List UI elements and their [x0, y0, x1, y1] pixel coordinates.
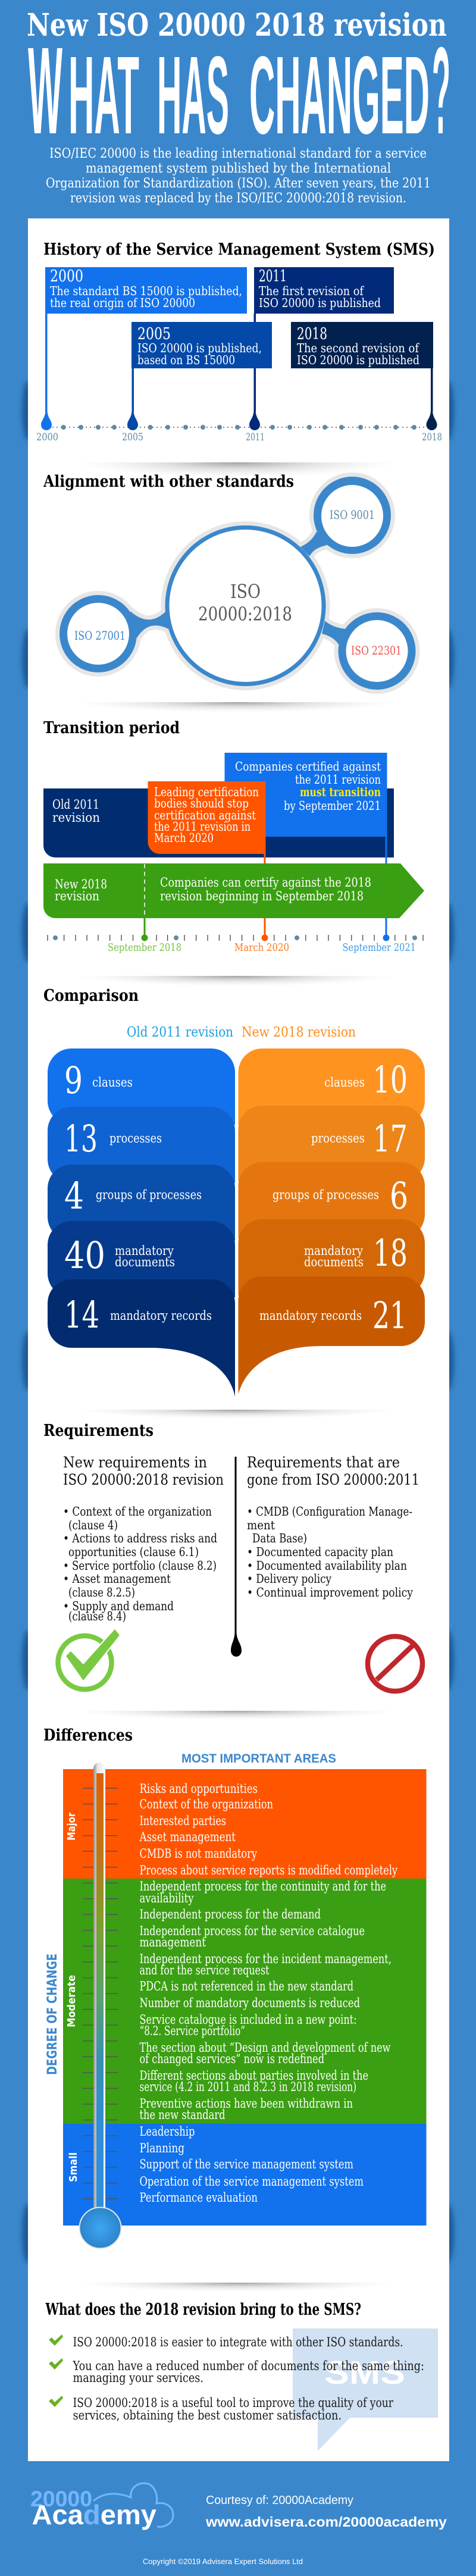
band: small: Support of the service management system: [139, 2157, 353, 2171]
circle ISO 27001: [60, 595, 137, 672]
benefit 3: [49, 2396, 394, 2423]
column: removed requirements: gone from ISO 20000:2011: [247, 1471, 419, 1488]
band: moderate: availability: [139, 1891, 194, 1905]
column: removed requirements: Data Base): [252, 1531, 307, 1545]
central circle: [165, 525, 326, 686]
chart: comparison: [48, 1023, 425, 1397]
column: new requirements: (clause 8.4): [68, 1609, 126, 1623]
new revision column: mandatory records: [259, 1309, 362, 1323]
column: new requirements: opportunities (clause 6.1): [68, 1545, 199, 1559]
column labels: [127, 1023, 356, 1040]
old revision column: mandatory records: [110, 1309, 212, 1323]
title: W: [28, 22, 62, 160]
old revision column: clauses: [92, 1075, 133, 1090]
band label: major: Major: [65, 1813, 78, 1841]
old revision column: groups of processes: [96, 1188, 202, 1203]
callout: certification bodies: bodies should stop: [154, 796, 249, 810]
axis labels: 2005: [122, 431, 143, 443]
intro text: revision was replaced by the ISO/IEC 20000:2018 revision.: [70, 191, 406, 206]
website url: www.advisera.com/20000academy: [205, 2514, 447, 2530]
intro text: ISO/IEC 20000 is the leading international standard for a service: [49, 146, 427, 161]
time axis: September 2021: [343, 941, 416, 954]
event 2018: ISO 20000 is published: [297, 353, 419, 367]
band label: small: Small: [67, 2152, 80, 2182]
thermometer: [80, 1763, 121, 2248]
column: new requirements: [63, 1454, 224, 1623]
old revision column: 4: [64, 1174, 84, 1217]
callout: must transition: Companies certified against: [235, 759, 381, 774]
new revision column: 6: [390, 1174, 408, 1217]
title: HAT: [68, 34, 139, 157]
event 2005: based on BS 15000: [137, 353, 235, 367]
column: new requirements: • Service portfolio (clause 8.2): [63, 1558, 217, 1573]
event 2000: the real origin of ISO 20000: [50, 296, 195, 310]
column labels: New 2018 revision: [242, 1023, 356, 1040]
event 2011: 2011: [259, 267, 287, 286]
benefit 2: [49, 2358, 424, 2386]
intro text: management system published by the International: [86, 161, 391, 176]
band: small: Operation of the service management system: [139, 2174, 364, 2189]
event 2000: 2000: [50, 267, 83, 286]
band: moderate: PDCA is not referenced in the new standard: [139, 1979, 353, 1993]
band: moderate: service (4.2 in 2011 and 8.2.3 in 2018 revision): [139, 2080, 356, 2094]
column: new requirements: • Supply and demand: [63, 1599, 174, 1613]
chart: transition period: [43, 753, 424, 954]
column: new requirements: (clause 4): [68, 1518, 118, 1532]
event 2018: [291, 322, 437, 430]
band: moderate: Service catalogue is included in a new point:: [139, 2012, 357, 2027]
axis labels: 2000: [36, 431, 58, 443]
new revision column: groups of processes: [273, 1188, 379, 1203]
callout: certification bodies: the 2011 revision in: [154, 819, 250, 834]
column: removed requirements: • Documented availability plan: [247, 1558, 407, 1573]
column labels: Old 2011 revision: [127, 1023, 233, 1040]
event 2005: ISO 20000 is published,: [137, 341, 262, 355]
band: moderate: The section about “Design and development of new: [139, 2040, 391, 2055]
column: new requirements: • Context of the organization: [63, 1504, 212, 1519]
heading: alignment: Alignment with other standards: [43, 472, 294, 491]
circle ISO 9001: ISO 9001: [330, 508, 375, 522]
benefit 2: managing your services.: [73, 2371, 203, 2386]
callout: must transition: by September 2021: [284, 799, 381, 813]
new revision arrow: revision: [55, 889, 99, 904]
column: new requirements: (clause 8.2.5): [68, 1585, 135, 1600]
main white panel: [28, 218, 449, 2461]
callout: certification bodies: certification against: [154, 808, 256, 822]
new revision column: 18: [373, 1231, 408, 1275]
event 2011: [249, 267, 394, 430]
axis labels: [36, 431, 442, 443]
callout: certification bodies: March 2020: [154, 831, 214, 845]
old revision column: documents: [115, 1255, 175, 1270]
band: moderate: Independent process for the service catalogue: [139, 1924, 365, 1938]
band: major: Process about service reports is modified completely: [139, 1863, 397, 1877]
event 2000: The standard BS 15000 is published,: [50, 284, 242, 298]
icon: check mark: [58, 1629, 120, 1689]
chart: differences thermometer: [45, 1752, 426, 2248]
new revision column: documents: [304, 1255, 364, 1270]
speech bubble with SMS: [293, 2328, 438, 2451]
event 2018: The second revision of: [297, 341, 419, 355]
column: new requirements: ISO 20000:2018 revision: [63, 1471, 224, 1488]
circle ISO 22301: ISO 22301: [351, 643, 402, 658]
icon: prohibited: [368, 1636, 422, 1691]
benefit 3: services, obtaining the best customer satisfaction.: [73, 2408, 342, 2423]
callout: certification bodies: [148, 781, 265, 854]
central circle: ISO: [230, 580, 261, 603]
footer: [30, 2483, 447, 2566]
central circle: 20000:2018: [198, 603, 292, 625]
event 2005: [127, 322, 272, 430]
intro text: [46, 146, 431, 206]
column: removed requirements: [247, 1454, 419, 1600]
callout: must transition: must transition: [300, 785, 381, 799]
column: removed requirements: ment: [247, 1518, 275, 1532]
heading: requirements: Requirements: [43, 1422, 154, 1440]
callout: certification bodies: Leading certification: [154, 785, 259, 799]
band: moderate: Independent process for the incident management,: [139, 1952, 392, 1966]
column: new requirements: New requirements in: [63, 1454, 207, 1471]
old revision column: 40: [64, 1234, 105, 1277]
column: removed requirements: • Delivery policy: [247, 1572, 331, 1586]
circle ISO 9001: [314, 477, 391, 554]
new revision arrow: New 2018: [55, 877, 107, 892]
band: moderate: Independent process for the continuity and for the: [139, 1879, 386, 1893]
time axis: March 2020: [234, 941, 289, 954]
event 2011: The first revision of: [259, 284, 364, 298]
old revision column: processes: [109, 1131, 162, 1146]
old revision bar: Old 2011: [52, 797, 99, 812]
time axis: [48, 934, 423, 954]
callout: must transition: the 2011 revision: [295, 772, 381, 787]
circle ISO 22301: [338, 612, 415, 690]
event 2018: 2018: [297, 325, 327, 343]
axis labels: 2018: [422, 431, 442, 443]
logo: 20000 Academy: 20000: [30, 2487, 92, 2511]
diagram: alignment with other standards: [60, 477, 415, 690]
band: moderate: Different sections about parties involved in the: [139, 2068, 368, 2083]
old revision column: 9: [64, 1059, 83, 1102]
new revision column: 17: [372, 1117, 408, 1160]
band: small: Performance evaluation: [139, 2190, 258, 2205]
benefit 3: ISO 20000:2018 is a useful tool to improve the quality of your: [73, 2396, 394, 2411]
column: new requirements: • Actions to address risks and: [63, 1531, 217, 1545]
band: major: Asset management: [139, 1830, 236, 1844]
new revision arrow: revision beginning in September 2018: [160, 889, 364, 904]
circle ISO 27001: ISO 27001: [74, 628, 126, 643]
new revision column: [238, 1048, 425, 1394]
heading: transition: Transition period: [43, 719, 180, 737]
logo: 20000 Academy: [30, 2483, 173, 2530]
column: removed requirements: • Documented capacity plan: [247, 1545, 393, 1559]
band: moderate: Preventive actions have been withdrawn in: [139, 2096, 353, 2111]
new revision column: clauses: [324, 1075, 365, 1090]
band: moderate: management: [139, 1935, 206, 1949]
old revision bar: [43, 788, 394, 857]
new revision arrow: [43, 863, 424, 918]
axis label: degree of change: DEGREE OF CHANGE: [45, 1954, 60, 2075]
band: major: CMDB is not mandatory: [139, 1846, 257, 1861]
panel: benefits: [49, 2328, 438, 2451]
heading: differences: Differences: [43, 1726, 133, 1745]
logo: 20000 Academy: Academy: [32, 2499, 156, 2530]
chart title: MOST IMPORTANT AREAS: [181, 1752, 336, 1766]
old revision column: 13: [64, 1117, 98, 1160]
callout: must transition: [225, 753, 387, 837]
copyright: Copyright ©2019 Advisera Expert Solutions Ltd: [143, 2557, 303, 2566]
speech bubble with SMS: SMS: [324, 2354, 405, 2391]
band label: moderate: Moderate: [65, 1975, 78, 2027]
axis labels: 2011: [246, 431, 265, 443]
band: small: [63, 2124, 426, 2226]
band: small: Leadership: [139, 2124, 195, 2139]
band: major: Interested parties: [139, 1814, 226, 1828]
band: moderate: of changed services” now is redefined: [139, 2052, 324, 2066]
new revision arrow: Companies can certify against the 2018: [160, 875, 371, 890]
old revision column: 14: [64, 1293, 99, 1336]
timeline: history of the SMS: [36, 267, 442, 443]
band: moderate: [63, 1879, 426, 2124]
heading: benefits: What does the 2018 revision bring to the SMS?: [45, 2300, 361, 2319]
old revision column: mandatory: [115, 1244, 174, 1259]
old revision bar: revision: [52, 810, 100, 825]
heading: comparison: Comparison: [43, 987, 139, 1005]
title: HAS: [157, 34, 229, 157]
event 2005: 2005: [137, 325, 171, 343]
band: moderate: and for the service request: [139, 1963, 270, 1977]
new revision column: mandatory: [304, 1244, 364, 1259]
band: major: [63, 1769, 426, 1879]
new revision column: 21: [372, 1294, 407, 1337]
event 2011: ISO 20000 is published: [259, 296, 381, 310]
band: moderate: Independent process for the demand: [139, 1907, 321, 1921]
band: major: Context of the organization: [139, 1797, 273, 1811]
band: moderate: “8.2. Service portfolio”: [139, 2024, 245, 2038]
column: removed requirements: Requirements that are: [247, 1454, 400, 1471]
old revision column: [48, 1048, 235, 1397]
column: new requirements: • Asset management: [63, 1572, 171, 1586]
band: small: Planning: [139, 2141, 184, 2155]
column: removed requirements: • CMDB (Configuration Manage-: [247, 1504, 412, 1519]
new revision column: 10: [372, 1058, 408, 1101]
time axis: September 2018: [108, 941, 181, 954]
courtesy text: Courtesy of: 20000Academy: [206, 2494, 353, 2507]
divider with drop: [231, 1457, 242, 1657]
band: major: Risks and opportunities: [139, 1782, 258, 1796]
band: moderate: Number of mandatory documents is reduced: [139, 1996, 360, 2010]
event 2000: [41, 267, 247, 430]
panel: requirements: [58, 1454, 422, 1691]
new revision column: processes: [311, 1131, 365, 1146]
column: removed requirements: • Continual improvement policy: [247, 1585, 413, 1600]
band: moderate: the new standard: [139, 2108, 225, 2122]
title: [27, 7, 450, 160]
